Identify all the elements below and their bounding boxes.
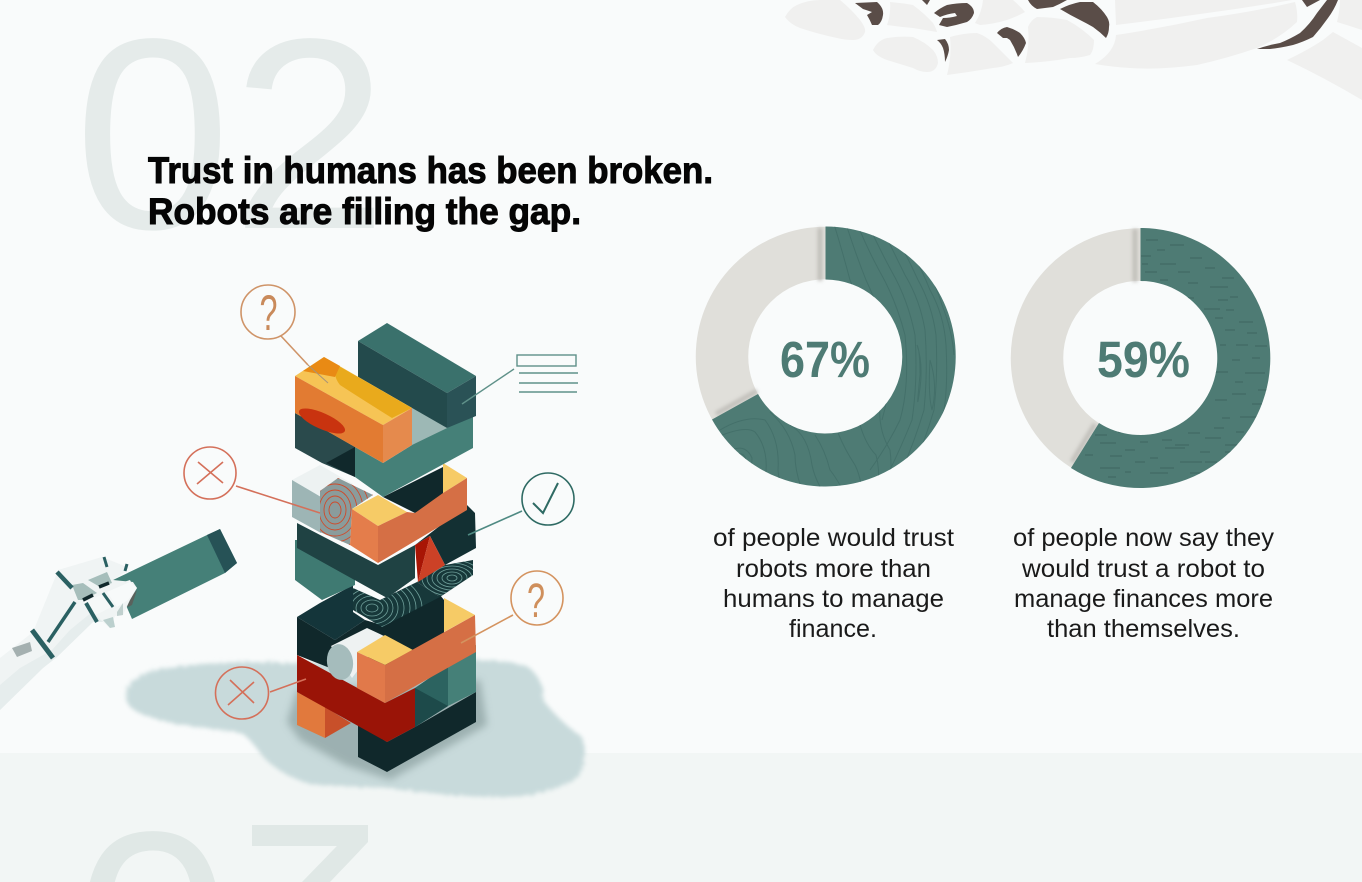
robot hand holding block xyxy=(0,529,237,710)
upper orange block xyxy=(350,463,467,563)
dark block behind cylinder xyxy=(297,585,444,670)
callout: question lower xyxy=(461,571,563,643)
top dark teal block xyxy=(358,323,476,428)
donut chart 67% xyxy=(712,224,956,500)
caption: 67%: of people would trust xyxy=(713,524,954,552)
heading: Robots are filling the gap. xyxy=(148,191,581,232)
teal right block xyxy=(415,645,476,727)
caption: 67%: finance. xyxy=(789,615,877,643)
mid teal block xyxy=(295,540,355,600)
heading: Trust in humans has been broken. xyxy=(148,150,713,191)
top orange block xyxy=(295,357,412,463)
lower orange block xyxy=(357,598,476,703)
caption: 59%: of people now say they xyxy=(1013,524,1275,552)
floor shadow xyxy=(126,660,585,797)
upper teal block xyxy=(355,412,473,497)
decorative leaf illustration top right xyxy=(785,0,1362,100)
caption: 59%: manage finances more xyxy=(1014,585,1273,613)
red prism xyxy=(415,536,445,582)
dark block right xyxy=(415,505,476,565)
callout: cross upper xyxy=(184,447,320,513)
caption: 67%: robots more than xyxy=(736,555,931,583)
caption: 59% xyxy=(1013,524,1275,643)
callout: check xyxy=(468,473,574,535)
caption: 59%: would trust a robot to xyxy=(1021,555,1265,583)
caption: 59%: than themselves. xyxy=(1047,615,1240,643)
white block with pattern xyxy=(292,465,373,545)
upper left dark block xyxy=(295,413,355,477)
grey recess xyxy=(412,405,447,446)
bottom dark block xyxy=(358,692,476,772)
bottom band xyxy=(0,753,1362,882)
heading xyxy=(148,150,713,232)
callout: document lines xyxy=(462,355,578,404)
caption: 67%: humans to manage xyxy=(723,585,944,613)
fingerprint block centre xyxy=(353,582,440,627)
black block under teal xyxy=(383,467,443,513)
callout: cross lower xyxy=(216,667,306,719)
donut 67% value: 67% xyxy=(780,331,870,388)
red block xyxy=(297,655,415,742)
robot arm xyxy=(0,557,137,710)
fingerprint block right xyxy=(417,560,473,597)
callout: question top: ? xyxy=(260,285,278,341)
tower contact shadow xyxy=(287,680,487,780)
donut chart 59% xyxy=(1037,228,1270,488)
background number 03 xyxy=(90,825,368,882)
dark long block xyxy=(297,523,415,598)
small orange block xyxy=(297,692,351,738)
pulled block xyxy=(113,529,237,619)
callout: question lower: ? xyxy=(527,575,545,628)
block tower xyxy=(292,323,482,772)
white cylinder xyxy=(325,628,384,682)
donut 59% value: 59% xyxy=(1097,331,1190,388)
caption: 67% xyxy=(713,524,954,643)
callout: question top xyxy=(241,285,328,383)
